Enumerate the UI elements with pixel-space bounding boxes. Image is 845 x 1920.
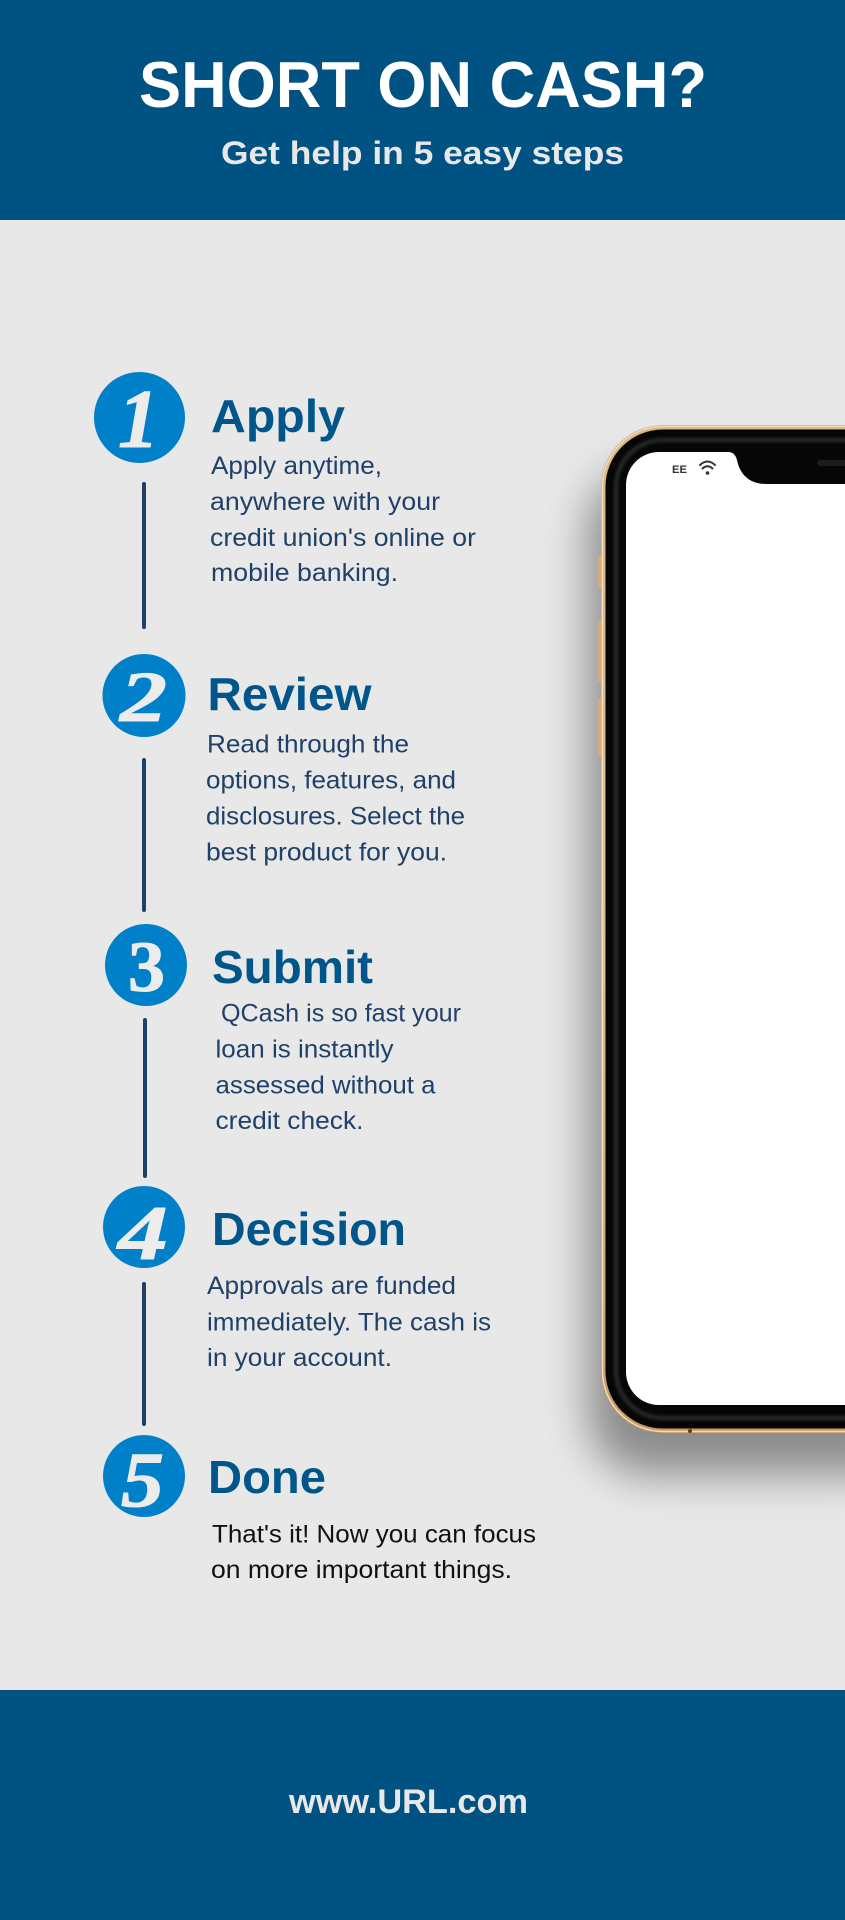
description: Apply anytime,	[211, 452, 382, 480]
description: immediately. The cash is	[207, 1308, 491, 1336]
number badge 4	[103, 1186, 185, 1276]
black bezel	[606, 430, 845, 1428]
connector line	[142, 482, 146, 629]
connector line	[142, 1282, 146, 1426]
description	[207, 1272, 491, 1372]
number badge 5	[103, 1435, 185, 1523]
description: on more important things.	[211, 1556, 512, 1584]
header band	[0, 0, 845, 220]
phone mockup	[588, 425, 845, 1475]
description: loan is instantly	[216, 1036, 394, 1064]
step 3	[105, 924, 461, 1178]
subtitle: Get help in 5 easy steps	[221, 135, 624, 171]
description: mobile banking.	[211, 559, 398, 587]
bezel highlight	[616, 440, 845, 1418]
footer band	[0, 1690, 845, 1920]
title: SHORT ON CASH?	[139, 48, 707, 121]
number badge 2: 2	[119, 657, 167, 737]
description: options, features, and	[206, 766, 456, 794]
description	[210, 452, 476, 587]
description: credit check.	[216, 1107, 364, 1135]
description: anywhere with your	[210, 488, 440, 516]
screen	[626, 452, 845, 1405]
number badge 1	[94, 372, 185, 466]
heading: Submit: Submit	[212, 941, 373, 993]
number badge 5: 5	[121, 1436, 164, 1523]
description: in your account.	[207, 1344, 392, 1372]
description: QCash is so fast your	[221, 1000, 461, 1028]
connector line	[143, 1018, 147, 1178]
number badge 4: 4	[115, 1190, 168, 1276]
description: assessed without a	[216, 1072, 436, 1100]
description: disclosures. Select the	[206, 802, 465, 830]
footer url: www.URL.com	[288, 1783, 528, 1821]
carrier label: EE	[672, 464, 687, 476]
description: Read through the	[207, 730, 409, 758]
frame highlight	[602, 426, 845, 1432]
speaker	[817, 460, 845, 466]
description	[211, 1520, 536, 1584]
number badge 3: 3	[128, 927, 165, 1007]
step 4	[103, 1186, 491, 1426]
number badge 1: 1	[118, 373, 159, 466]
connector line	[142, 758, 146, 912]
description	[216, 1000, 461, 1135]
step 2	[102, 654, 465, 912]
gold frame	[601, 425, 845, 1433]
phone shadow	[588, 470, 845, 1475]
description: Approvals are funded	[207, 1272, 456, 1300]
side buttons	[598, 555, 602, 757]
number badge 2	[102, 654, 186, 737]
heading: Done: Done	[208, 1451, 326, 1503]
heading: Apply: Apply	[211, 390, 345, 442]
description	[206, 730, 465, 866]
description: That's it! Now you can focus	[212, 1520, 536, 1548]
step 1	[94, 372, 476, 629]
bottom sensor dot	[688, 1429, 692, 1433]
description: credit union's online or	[210, 524, 476, 552]
number badge 3	[105, 924, 187, 1007]
heading: Review: Review	[208, 668, 372, 720]
icon: wifi	[700, 462, 715, 475]
step 5	[103, 1435, 536, 1584]
heading: Decision: Decision	[212, 1203, 406, 1255]
description: best product for you.	[206, 838, 447, 866]
